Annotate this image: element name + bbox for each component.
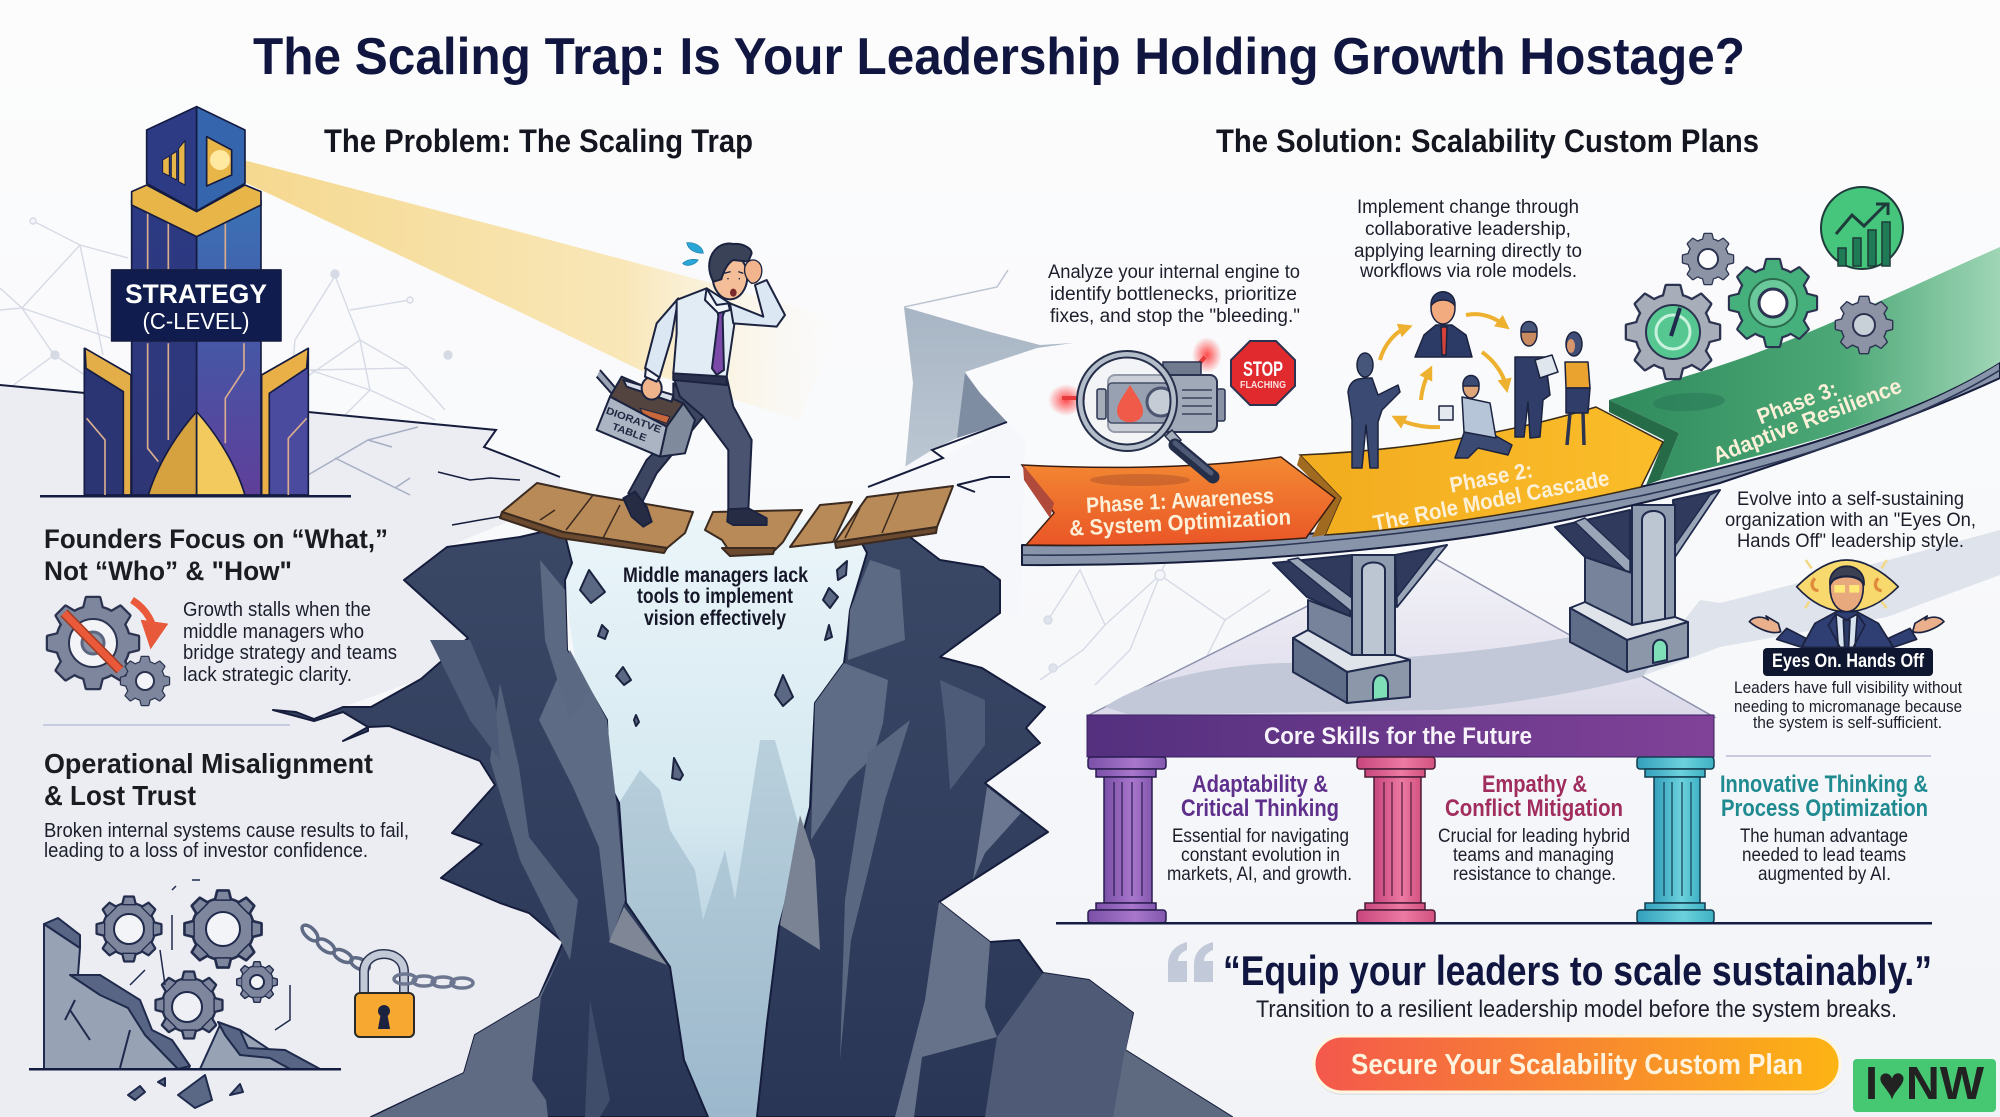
phase labels: Phase 2:: [1447, 457, 1535, 498]
chasm sky: [555, 520, 870, 1117]
ground line under wall: [29, 1068, 341, 1070]
mouth: [730, 289, 737, 297]
eyes: [724, 272, 743, 279]
title: The Scaling Trap: Is Your Leadership Holding Growth Hostage?: [253, 28, 1745, 86]
tower: strategy C-level: [84, 107, 308, 495]
woman top: [1565, 362, 1590, 388]
skill: innovative text: The human advantage: [1740, 826, 1908, 847]
text block: operational misalignment: & Lost Trust: [44, 780, 196, 811]
heading: the solution: The Solution: Scalability Custom Plans: [1216, 123, 1759, 159]
orange tools: [640, 408, 670, 423]
text block: operational misalignment: Broken internal systems cause results to fail,: [44, 820, 409, 842]
sweat drops: [683, 243, 703, 265]
head man right: [1521, 322, 1537, 346]
skill: innovative text: Process Optimization: [1721, 795, 1928, 822]
base front: [1347, 660, 1410, 703]
front shoe: [727, 508, 767, 525]
text: phase 3 description: Evolve into a self-sustaining: [1737, 489, 1964, 510]
light beam: [232, 157, 840, 420]
logo badge: I♥NW: [1865, 1057, 1985, 1109]
cliff edge outline and cracks: [0, 385, 560, 525]
left brace: [1555, 510, 1630, 573]
face: [1830, 577, 1863, 612]
right hand: [1913, 616, 1944, 633]
left rock mass: [273, 527, 708, 1117]
column front: [1632, 505, 1675, 627]
icon: crumbling wall and broken gears: [44, 880, 320, 1108]
laptop: [1439, 406, 1453, 420]
wrench: [597, 370, 632, 411]
tower badge label: (C-LEVEL): [142, 308, 250, 334]
text block: founders focus: bridge strategy and teams: [183, 642, 397, 664]
label: eyes on hands off: Eyes On. Hands Off: [1772, 651, 1925, 672]
rays: [1805, 560, 1887, 608]
bridge pier 2: [1555, 490, 1720, 672]
column side: [1585, 557, 1632, 625]
badge: [112, 270, 281, 341]
woman head: [1566, 332, 1582, 356]
phase 3 ribbon: [1609, 247, 2000, 485]
standing man right: [1515, 357, 1550, 438]
background network right: [1040, 525, 1270, 685]
phase labels: The Role Model Cascade: [1371, 465, 1611, 536]
role model group: [1348, 292, 1590, 468]
text: phase 2 description: [1354, 197, 1582, 282]
eye halo: [1797, 560, 1898, 612]
gripping hand: [642, 377, 662, 400]
text block: founders focus: Founders Focus on “What,”: [44, 524, 388, 554]
toolbox handle: [623, 380, 673, 402]
text block: founders focus: Not “Who” & "How": [44, 556, 292, 586]
quote subtext: Transition to a resilient leadership model before the system breaks.: [1256, 996, 1897, 1023]
left arm: [645, 298, 678, 378]
skill: empathy text: [1438, 771, 1630, 885]
cube left: [147, 107, 197, 211]
lapels: [1828, 614, 1865, 647]
broken plank bridge: [500, 483, 953, 556]
phase labels: [1069, 373, 1905, 541]
base door: [1373, 675, 1388, 700]
tower left shaft: [132, 200, 197, 495]
torso: [673, 288, 735, 377]
tower ground line: [40, 495, 351, 498]
text block: founders focus: Growth stalls when the: [183, 599, 371, 621]
skill: empathy text: Empathy &: [1482, 771, 1587, 798]
text: phase 3 description: Hands Off" leadership style.: [1737, 531, 1964, 552]
leader bust: [1415, 325, 1472, 357]
icon: misaligned gears: [48, 598, 169, 705]
right wing: [262, 348, 308, 495]
text: phase 3 description: [1725, 489, 1976, 552]
right brace: [1673, 490, 1720, 557]
toolbox inside: [610, 377, 683, 427]
column front: [1352, 555, 1395, 660]
base top: [1293, 630, 1410, 672]
column: empathy: [1357, 757, 1435, 923]
toolbox label: [600, 406, 663, 448]
text block: operational misalignment: [44, 748, 409, 862]
text: leaders visibility: Leaders have full visibility without: [1734, 678, 1962, 697]
right wing gold: [262, 348, 308, 495]
skill: adaptability text: Critical Thinking: [1181, 795, 1339, 822]
skill: empathy text: Crucial for leading hybrid: [1438, 826, 1630, 847]
text: leaders visibility: [1734, 678, 1962, 732]
bars icon: [163, 141, 185, 185]
distant peaks in chasm: [619, 740, 810, 1117]
text: phase 2 description: Implement change through: [1357, 197, 1579, 218]
skill: adaptability text: Essential for navigating: [1172, 826, 1349, 847]
quote mark: [1168, 942, 1213, 982]
icon: growth chart circle: [1821, 187, 1903, 269]
CTA button: [1314, 1036, 1840, 1095]
text: phase 2 description: workflows via role models.: [1359, 261, 1577, 282]
suit: [1802, 612, 1893, 647]
stop sign: [1231, 341, 1295, 405]
stop sign: FLACHING: [1240, 380, 1286, 391]
kneeling legs: [1455, 430, 1512, 458]
base left: [1293, 638, 1347, 703]
head of man left: [1357, 353, 1373, 377]
skill: innovative text: needed to lead teams: [1742, 845, 1906, 866]
skill: innovative text: [1720, 771, 1928, 885]
bridge pier 1: [1273, 545, 1447, 703]
left wing: [84, 348, 131, 495]
leader head: [1431, 292, 1455, 324]
plateau edge line and cracks: [868, 422, 1010, 492]
glowing glasses: [1834, 585, 1859, 593]
dome right: [197, 412, 245, 495]
divider: [1726, 755, 1931, 757]
toolbox front: [597, 397, 667, 457]
right brace strip: [1675, 490, 1720, 557]
column: adaptability: [1088, 757, 1166, 923]
skirt: [1566, 388, 1590, 413]
caption: middle managers: vision effectively: [644, 607, 786, 630]
kneeling torso: [1462, 397, 1496, 438]
red tie: [1441, 327, 1447, 355]
skill: empathy text: teams and managing: [1453, 845, 1614, 866]
right rock mass: [757, 537, 1232, 1117]
text: phase 2 description: applying learning directly to: [1354, 241, 1582, 262]
toolbox side: [660, 403, 695, 457]
skill: adaptability text: constant evolution in: [1181, 845, 1340, 866]
caption: middle managers: [623, 564, 808, 630]
figure: eyes on hands off: [1749, 560, 1944, 647]
standing man left: [1348, 378, 1400, 468]
phase 2 arrow: [1297, 407, 1663, 537]
raised arm: [730, 280, 785, 327]
phase labels: Adaptive Resilience: [1709, 373, 1905, 468]
belt: [673, 373, 727, 385]
tower badge label: STRATEGY: [125, 279, 267, 309]
text: leaders visibility: needing to micromanage because: [1734, 697, 1962, 716]
text: phase 1 description: identify bottlenecks, prioritize: [1050, 284, 1297, 305]
toolbox label: DIORATVE: [604, 406, 663, 436]
base top: [1570, 602, 1688, 640]
kneeling hair: [1463, 376, 1479, 386]
background swoosh behind piers: [1640, 530, 2000, 677]
base front: [1627, 622, 1688, 672]
arrows: [1380, 314, 1506, 427]
band: core skills: Core Skills for the Future: [1264, 723, 1532, 750]
hair: [1830, 566, 1864, 585]
text block: operational misalignment: Operational Misalignment: [44, 748, 373, 779]
phase 1 arrow: [1022, 457, 1335, 545]
left arm: [1777, 628, 1806, 647]
cuff: [645, 368, 659, 382]
icon: padlock and chain: [299, 922, 473, 1037]
toolbox label: TABLE: [610, 422, 648, 444]
tower right shaft: [197, 200, 261, 495]
shirt: [1836, 614, 1857, 647]
label: eyes on hands off: [1763, 648, 1933, 676]
cube right: [197, 107, 245, 211]
hair: [709, 243, 752, 282]
bridge deck: [1022, 362, 2000, 565]
woman legs: [1567, 413, 1584, 445]
column side: [1308, 600, 1352, 660]
tie: [712, 305, 726, 375]
distant cliff right: [904, 270, 1073, 470]
text block: founders focus: middle managers who: [183, 621, 364, 643]
lamp glow: [210, 150, 230, 170]
left cliff plateau: [0, 385, 563, 1117]
circuit lines: [148, 213, 244, 462]
column: innovative: [1637, 757, 1714, 923]
text: phase 1 description: Analyze your internal engine to: [1048, 262, 1300, 283]
right brace: [1395, 545, 1447, 607]
roof shadow swoosh: [1105, 620, 1665, 715]
tie: [1843, 620, 1850, 647]
gear cluster: [1627, 234, 1892, 378]
skill: innovative text: augmented by AI.: [1758, 864, 1891, 885]
eye marks: [1812, 578, 1882, 591]
dome left: [148, 412, 197, 495]
left hand: [1749, 616, 1781, 633]
right brace strip: [1397, 545, 1447, 607]
left wing gold: [85, 348, 131, 495]
text block: founders focus: [44, 524, 397, 686]
skill: empathy text: Conflict Mitigation: [1445, 795, 1623, 822]
column panel: [1642, 511, 1665, 627]
stop sign: STOP: [1243, 358, 1283, 381]
phase labels: Phase 3:: [1753, 376, 1841, 429]
base left: [1570, 608, 1627, 672]
tower badge label: [125, 279, 267, 334]
clipboard: [1535, 355, 1558, 378]
back shoe: [623, 492, 652, 527]
caption: middle managers: Middle managers lack: [623, 564, 808, 587]
woman face: [1567, 339, 1575, 353]
phase labels: Phase 1: Awareness: [1086, 483, 1275, 518]
skill: adaptability text: [1167, 771, 1352, 885]
falling rock fragments: [580, 561, 847, 780]
skill: innovative text: Innovative Thinking &: [1720, 771, 1928, 798]
heading: the problem: The Problem: The Scaling Trap: [324, 123, 753, 159]
collar: [705, 288, 730, 313]
hand on head: [745, 260, 762, 283]
text block: founders focus: lack strategic clarity.: [183, 664, 352, 686]
hair man right: [1521, 322, 1537, 332]
right plateau: [860, 422, 1025, 620]
background network left: [0, 218, 452, 420]
skill ground line: [1056, 922, 1932, 924]
skill: adaptability text: markets, AI, and growth.: [1167, 864, 1352, 885]
divider: [43, 724, 290, 726]
CTA button: Secure Your Scalability Custom Plan: [1351, 1049, 1803, 1081]
text: phase 1 description: [1048, 262, 1300, 327]
head: [713, 254, 747, 299]
skill: adaptability text: Adaptability &: [1192, 771, 1328, 798]
column panel: [1362, 562, 1385, 660]
left brace: [1273, 555, 1352, 617]
back leg: [628, 383, 703, 503]
text: phase 3 description: organization with an "Eyes On,: [1725, 510, 1976, 531]
base door: [1653, 640, 1667, 663]
band: core skills: [1087, 715, 1714, 757]
magnifier over engine: [1048, 337, 1225, 477]
text: leaders visibility: the system is self-sufficient.: [1753, 713, 1942, 732]
left brace strip: [1288, 558, 1352, 612]
text: phase 1 description: fixes, and stop the "bleeding.": [1050, 306, 1300, 327]
right arm: [1888, 628, 1917, 647]
wing circuit: [87, 418, 307, 495]
phase labels: & System Optimization: [1069, 504, 1292, 541]
front leg: [673, 377, 752, 510]
text: phase 2 description: collaborative leadership,: [1365, 219, 1571, 240]
skill: empathy text: resistance to change.: [1453, 864, 1616, 885]
temple roof: [1089, 550, 1714, 717]
gold chevron collar: [132, 185, 261, 237]
text block: operational misalignment: leading to a loss of investor confidence.: [44, 840, 368, 862]
kneeling head: [1463, 376, 1479, 398]
left brace strip: [1575, 518, 1630, 575]
caption: middle managers: tools to implement: [637, 585, 793, 608]
leader hair: [1431, 292, 1455, 306]
lamp: [207, 137, 232, 186]
worried middle manager carrying toolbox: [597, 243, 785, 527]
